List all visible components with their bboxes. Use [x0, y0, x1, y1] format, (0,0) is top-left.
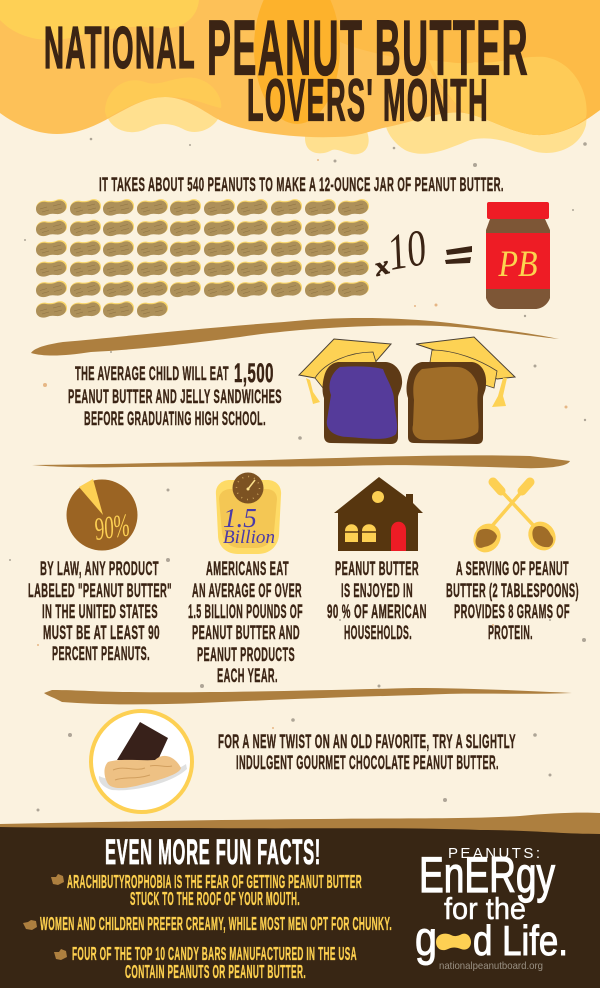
icon: chocolate peanut butter plate	[91, 711, 192, 812]
text: by law: MUST BE AT LEAST 90	[43, 623, 160, 644]
text: average child: BEFORE GRADUATING HIGH SCHOOL.	[84, 409, 266, 430]
panel: 90 percent by law	[28, 479, 172, 665]
title: NATIONAL	[44, 15, 196, 81]
text: average child	[68, 358, 282, 430]
text: serving	[446, 559, 579, 644]
peanut grid: 54 peanuts	[36, 199, 369, 318]
left graduation cap	[299, 339, 391, 404]
text: by law: IN THE UNITED STATES	[42, 602, 158, 623]
text: PEANUT BUTTER AND JELLY SANDWICHES	[68, 387, 282, 408]
fact 3	[54, 944, 357, 982]
multiplier: x10: x	[370, 250, 392, 282]
logo: peanuts energy for the good life: PEANUTS:	[448, 845, 540, 862]
text: by law: PERCENT PEANUTS.	[52, 644, 150, 665]
logo: peanuts energy for the good life: nationalpeanutboard.org	[439, 960, 543, 972]
text: average child: 1,500	[234, 358, 274, 388]
text: by law: BY LAW, ANY PRODUCT	[40, 559, 159, 580]
text: households: 90 % OF AMERICAN	[327, 602, 427, 623]
divider stroke 2	[32, 455, 570, 468]
equals sign	[445, 246, 472, 264]
text: serving: PROTEIN.	[488, 623, 533, 644]
text: AN AVERAGE OF OVER	[192, 581, 302, 602]
text: americans eat: PEANUT BUTTER AND	[192, 623, 300, 644]
multiplier: x10: 10	[383, 219, 430, 281]
text: average child: THE AVERAGE CHILD WILL EAT	[75, 364, 229, 385]
text: LABELED "PEANUT BUTTER"	[28, 581, 172, 602]
text: households: HOUSEHOLDS.	[344, 623, 412, 644]
text: households: PEANUT BUTTER	[335, 559, 419, 580]
chart: 90% pie	[66, 479, 138, 550]
fact 1	[51, 872, 362, 909]
text: 1.5 BILLION POUNDS OF	[188, 602, 303, 623]
text: households	[327, 559, 427, 644]
icon: crossed spoons	[468, 482, 561, 558]
chart: 90% pie: 90%	[92, 506, 132, 547]
footer top stroke	[0, 813, 600, 834]
panel: 90 percent of households	[327, 477, 427, 644]
text: americans eat: AMERICANS EAT	[206, 559, 289, 580]
logo: peanuts energy for the good life: g	[415, 913, 437, 966]
fact 1: STUCK TO THE ROOF OF YOUR MOUTH.	[130, 889, 300, 909]
panel: protein serving	[446, 482, 579, 644]
divider stroke 1	[31, 318, 559, 356]
text: households: IS ENJOYED IN	[341, 581, 413, 602]
icon: bathroom scale: Billion	[223, 527, 275, 548]
logo: peanuts energy for the good life: for the	[444, 891, 526, 926]
text: americans eat	[188, 559, 303, 687]
text: by law	[28, 559, 172, 665]
logo: peanuts energy for the good life: d Life.	[473, 917, 568, 964]
fact 3: CONTAIN PEANUTS OR PEANUT BUTTER.	[125, 962, 306, 982]
text: chocolate peanut butter	[218, 732, 516, 774]
peanut butter toast	[406, 362, 486, 444]
jelly toast	[322, 362, 402, 444]
icon: house	[334, 477, 423, 551]
title	[44, 4, 529, 134]
fact 2	[23, 914, 392, 934]
icon: peanut butter jar	[486, 202, 550, 309]
text: americans eat: PEANUT PRODUCTS	[197, 645, 295, 666]
right graduation cap	[416, 337, 515, 407]
panel: 1.5 billion pounds	[188, 472, 303, 687]
panel: even more fun facts: EVEN MORE FUN FACTS!	[105, 833, 321, 872]
icon: graduating sandwiches	[299, 337, 515, 444]
icon: bathroom scale	[216, 472, 281, 554]
divider stroke 3	[44, 688, 572, 704]
footer background	[0, 826, 600, 988]
header: peanut butter drips	[0, 0, 600, 154]
logo: peanuts energy for the good life	[415, 845, 568, 972]
icon: bathroom scale: 1.5	[223, 503, 257, 533]
icon: peanut butter jar: PB	[498, 244, 538, 285]
text: americans eat: EACH YEAR.	[217, 666, 278, 687]
panel: even more fun facts	[0, 813, 600, 988]
logo: peanuts energy for the good life: EnERgy	[419, 847, 555, 903]
